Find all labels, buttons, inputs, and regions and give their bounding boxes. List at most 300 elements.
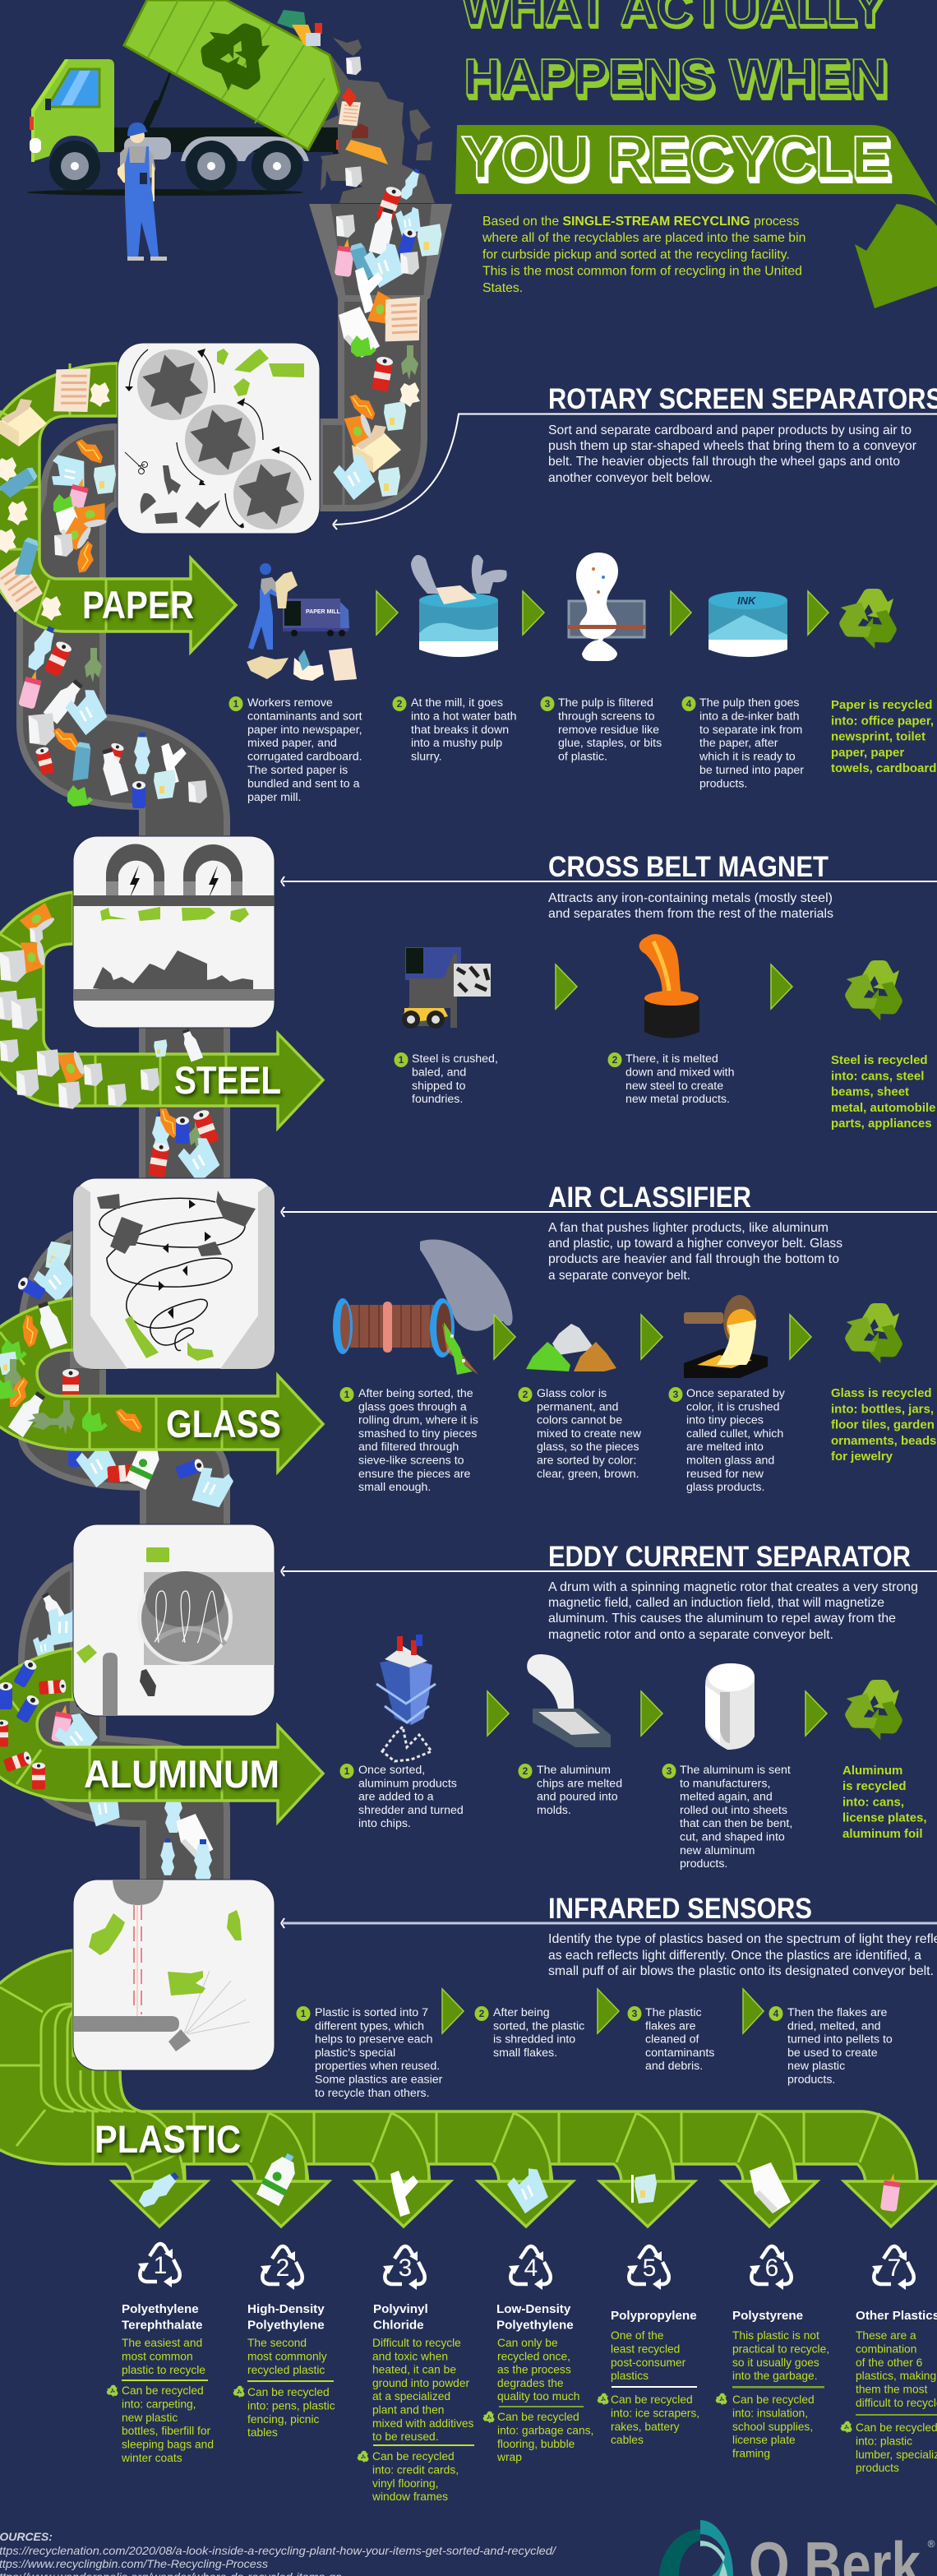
dark pile [93,950,253,993]
lift cylinder [141,72,171,127]
flying aluminum [76,1644,97,1663]
uses 2: fencing, picnic [247,2413,320,2426]
icon: worker and truck [247,563,357,681]
resin code 5 [627,2246,669,2290]
icon: hot water tank [411,555,507,657]
description 3: ground into powder [372,2377,470,2389]
step 2 plastic: is shredded into [493,2033,575,2046]
uses 1: bottles, fiberfill for [122,2425,211,2437]
description 4: recycled once, [497,2350,570,2362]
description 2: recycled plastic [247,2364,325,2376]
resin code 5: 5 [643,2255,656,2282]
step 1 paper: Workers remove [247,696,333,710]
chute arrow 1 [113,2181,207,2227]
uses 3: window frames [372,2490,448,2503]
step 1 glass: smashed to tiny pieces [358,1427,477,1441]
result paper: newsprint, toilet [831,730,925,744]
step 3 plastic: and debris. [645,2060,703,2073]
arrow step paper 4 [808,591,829,635]
uses 7: into: plastic [856,2435,912,2447]
step 4 paper: to separate ink from [699,724,802,737]
laser beams [134,1905,141,2014]
description 7: them the most [856,2384,928,2396]
belt: steel green [0,892,323,1128]
name 1: Polyethylene [122,2302,199,2316]
step 1 plastic: plastic's special [315,2046,395,2060]
step 1 paper: 1 [233,698,239,710]
step 3 aluminum: rolled out into sheets [680,1804,787,1817]
step 2 paper [393,696,517,764]
description 3: to be reused. [372,2430,439,2443]
description: magnet: Attracts any iron-containing metals (mostly steel) [548,891,833,905]
uses 4: flooring, bubble [497,2438,575,2450]
step 1 paper: bundled and sent to a [247,777,360,790]
step 1 glass: sieve-like screens to [358,1454,464,1467]
description 3: heated, it can be [372,2364,456,2376]
intro text: where all of the recyclables are placed into the same bin [482,231,805,245]
step 4 plastic: be used to create [787,2046,878,2060]
uses 4: wrap [496,2451,522,2463]
name 6: Polystyrene [732,2309,803,2323]
description 7: plastics, making [856,2370,936,2382]
step 1 paper: contaminants and sort [247,710,362,723]
funnel conveyor [309,204,452,508]
belt segment to air classifier [142,1024,227,1184]
cab window [48,69,99,107]
description 1: plastic to recycle [122,2364,205,2376]
panel: infrared sensors [73,1880,275,2070]
result glass: Glass is recycled [831,1386,932,1400]
name 5: Polypropylene [611,2309,697,2323]
arrow step aluminum 1 [487,1691,509,1736]
title line: happens when: HAPPENS WHEN [464,49,888,106]
uses 1: sleeping bags and [122,2439,214,2451]
icon: pouring aluminum [527,1654,611,1747]
uses 6: Can be recycled [732,2393,815,2406]
chassis [114,127,338,152]
arrow step steel 2 [771,964,792,1009]
uses 5: cables [611,2434,644,2446]
description 6: This plastic is not [732,2329,819,2342]
step 1 steel [395,1052,498,1106]
step 3 glass: reused for new [686,1468,764,1481]
trash on steel belt [0,903,223,1186]
step 1 steel: foundries. [412,1093,463,1106]
name 3: Chloride [373,2318,424,2332]
uses 5: into: ice scrapers, [611,2407,699,2419]
step 3 aluminum: that can then be bent, [680,1817,792,1830]
name 2: Polyethylene [247,2318,325,2332]
trash on glass belt [0,1300,145,1437]
step 2 steel: There, it is melted [625,1052,718,1066]
uses 3: vinyl flooring, [372,2477,439,2490]
step 3 glass: called cullet, which [686,1427,783,1441]
uses 1: winter coats [121,2452,182,2464]
icon: recycle aluminum [838,1680,909,1745]
step 1 plastic: helps to preserve each [315,2033,433,2046]
step 1 plastic [296,2006,443,2100]
description 2: most commonly [247,2350,327,2362]
arrow step paper 2 [523,591,544,635]
step 2 steel: new steel to create [625,1080,723,1093]
rotary wheels [136,349,306,530]
resin code 2 [261,2246,302,2290]
step 2 paper: that breaks it down [411,724,509,737]
step 2 plastic [475,2006,584,2060]
description 3: Difficult to recycle [372,2337,461,2349]
step 3 paper [541,696,662,764]
intro text: States. [482,281,523,295]
paper mill truck [283,599,340,628]
step 3 plastic [628,2006,714,2073]
description 5: post-consumer [611,2356,686,2369]
step 2 plastic: sorted, the plastic [493,2019,584,2033]
uses 1: Can be recycled [122,2384,204,2397]
belt: paper green [0,363,236,652]
truck [27,0,339,196]
trash on aluminum gray belt [33,1591,213,1885]
step 2 plastic: After being [493,2006,550,2019]
result aluminum: aluminum foil [842,1827,922,1841]
step 4 plastic: turned into pellets to [787,2033,893,2046]
step 1 glass: 1 [344,1389,350,1400]
description: rotary: belt. The heavier objects fall through the wheel gaps and onto [548,455,900,469]
step 2 aluminum: molds. [537,1804,571,1817]
intro text: Based on the SINGLE-STREAM RECYCLING process [482,215,799,229]
step 2 paper: into a hot water bath [411,710,517,723]
falling trash silhouettes [321,38,435,203]
callout line: infrared [281,1918,937,1928]
step 4 plastic: products. [787,2074,835,2087]
step 1 glass: rolling drum, where it is [358,1414,478,1427]
upper belt [73,895,275,906]
green sorted items [217,349,304,396]
callout line: eddy [281,1566,937,1576]
description 1: The easiest and [122,2337,202,2349]
fender [181,136,309,161]
carried cardboard [275,571,298,608]
step 2 paper: At the mill, it goes [411,696,503,710]
step 1 steel: Steel is crushed, [412,1052,498,1066]
step 1 paper [228,696,362,804]
uses 5: Can be recycled [611,2393,693,2406]
resin code 4: 4 [524,2255,538,2282]
result glass: for jewelry [831,1450,893,1464]
dark bottle [140,1669,156,1696]
result paper: into: office paper, [831,714,934,728]
description: magnet [548,891,833,921]
step 3 paper: The pulp is filtered [558,696,653,710]
step 1 glass: ensure the pieces are [358,1468,471,1481]
step 2 glass: permanent, and [537,1400,618,1413]
intro text: for curbside pickup and sorted at the recycling facility. [482,247,790,261]
worker [118,123,167,261]
description 1: most common [122,2350,193,2362]
panel: rotary screen [118,343,320,534]
heading: air classifier: AIR CLASSIFIER [548,1182,751,1214]
step 2 paper: 2 [397,698,403,710]
mini recycle 5 [596,2393,610,2407]
uses 3: Can be recycled [372,2450,455,2463]
arrow step plastic 2 [598,1989,619,2033]
heading: infrared: INFRARED SENSORS [548,1893,812,1925]
field loops [155,1591,222,1643]
plastic type 6 [714,2246,829,2460]
arrow step plastic 1 [442,1989,464,2033]
step 2 aluminum: chips are melted [537,1777,622,1790]
resin code 6 [750,2246,792,2290]
description: rotary: push them up star-shaped wheels that bring them to a conveyor [548,439,916,453]
resin code 7: 7 [888,2255,901,2282]
belt: aluminum green [0,1649,323,1822]
step 3 aluminum: melted again, and [680,1791,773,1804]
air spiral [99,1198,245,1351]
uses 1: new plastic [122,2412,178,2424]
uses 1: into: carpeting, [122,2398,196,2410]
result glass: into: bottles, jars, [831,1402,934,1416]
step 3 glass: color, it is crushed [686,1400,780,1413]
description: air: A fan that pushes lighter products, like aluminum [548,1221,829,1235]
result steel: parts, appliances [831,1117,932,1131]
step 1 plastic: Plastic is sorted into 7 [315,2006,428,2019]
step 2 steel: new metal products. [625,1093,730,1106]
description: air [548,1221,842,1283]
cab [31,59,114,162]
result aluminum: is recycled [842,1779,907,1793]
plastic type 5 [596,2246,699,2446]
step 2 glass: clear, green, brown. [537,1468,639,1481]
magnetic rotor block [144,1572,275,1665]
step 3 aluminum: products. [680,1857,727,1871]
step 3 glass: molten glass and [686,1454,774,1467]
step 3 aluminum: cut, and shaped into [680,1830,785,1843]
arrow step aluminum 3 [805,1691,827,1736]
banner text: YOU RECYCLE [461,125,891,191]
divider 6 [732,2386,824,2388]
air puff lines [184,1971,250,2034]
step 1 paper: paper mill. [247,791,301,804]
description: infrared: as each reflects light differently. Once the plastics are identified, a [548,1949,921,1963]
chute arrow 4 [478,2181,573,2227]
plastic items [136,2149,902,2217]
step 3 aluminum [662,1764,792,1871]
step 2 plastic: small flakes. [493,2046,557,2060]
icon: glass piles [526,1324,616,1371]
arrow step glass 1 [494,1315,515,1359]
sources: https://www.recyclingbin.com/The-Recycling-Process [0,2557,268,2570]
plastic type 4 [482,2246,593,2463]
step 4 paper: which it is ready to [699,751,796,764]
step 4 paper: 4 [686,698,692,710]
uses 6: license plate [732,2434,796,2446]
description 4: as the process [497,2364,571,2376]
step 1 steel: 1 [399,1054,404,1066]
step 1 plastic: Some plastics are easier [315,2074,443,2087]
recycle on bed [181,8,284,108]
description: rotary [548,423,916,485]
step 3 aluminum: new aluminum [680,1844,755,1857]
uses 4: into: garbage cans, [497,2424,593,2436]
step 1 aluminum: 1 [344,1765,350,1777]
arrow step paper 3 [671,591,691,635]
step 2 steel [608,1052,735,1106]
resin code 3 [383,2246,425,2290]
divider 4 [499,2406,584,2407]
description: eddy: magnetic rotor and onto a separate conveyor belt. [548,1628,833,1642]
result aluminum: Aluminum [842,1764,902,1778]
result steel: into: cans, steel [831,1069,924,1083]
icon: molten steel [639,934,699,1038]
step 1 glass: After being sorted, the [358,1387,473,1400]
icon: ink tank: INK [737,594,757,607]
uses 2: into: pens, plastic [247,2399,335,2412]
heading: cross belt magnet: CROSS BELT MAGNET [548,851,829,883]
mini recycle 4 [482,2412,496,2425]
lower belt [73,989,275,1001]
step 3 aluminum: to manufacturers, [680,1777,770,1790]
step 1 glass: small enough. [358,1481,431,1494]
description 7: of the other 6 [856,2356,923,2369]
label: aluminum: ALUMINUM [84,1752,279,1796]
plastic type 3 [356,2246,474,2503]
step 2 steel: down and mixed with [625,1066,735,1079]
divider 1 [122,2379,208,2381]
icon: ink tank [709,591,787,657]
description 6: into the garbage. [732,2370,818,2382]
description 3: at a specialized [372,2390,450,2403]
description: infrared: small puff of air blows the plastic onto its designated conveyor belt. [548,1964,934,1978]
step 3 plastic: 3 [632,2008,638,2019]
description 2: The second [247,2337,307,2349]
step 2 glass: 2 [523,1389,529,1400]
magnets [106,844,242,900]
step 3 aluminum: The aluminum is sent [680,1764,791,1777]
worker body [248,577,286,650]
mini recycle 6 [714,2393,728,2407]
chute arrow 6 [722,2181,817,2227]
step 2 glass: colors cannot be [537,1414,622,1427]
step 1 plastic: different types, which [315,2019,424,2033]
step 2 aluminum [518,1764,622,1817]
mini recycle 3 [356,2451,370,2464]
plastic type 2 [232,2246,335,2439]
step 3 aluminum: 3 [667,1765,672,1777]
description 5: plastics [611,2370,649,2382]
label: plastic: PLASTIC [95,2117,241,2161]
divider 2 [247,2380,334,2382]
trash on aluminum belt [0,1658,67,1789]
resin code 7 [872,2246,914,2290]
uses 3: into: credit cards, [372,2463,459,2476]
description 4: quality too much [497,2390,579,2403]
step 3 glass: Once separated by [686,1387,785,1400]
result aluminum: into: cans, [842,1795,904,1809]
rotation arrows [129,349,311,528]
name 1: Terephthalate [122,2318,202,2332]
resin code 2: 2 [276,2255,289,2282]
description 3: mixed with additives [372,2417,474,2430]
description 3: plant and then [372,2404,444,2416]
divider 3 [373,2444,474,2446]
step 3 paper: remove residue like [558,724,659,737]
sources: https://recyclenation.com/2020/08/a-look-inside-a-recycling-plant-how-your-items-get-sorted-and-recycled/ [0,2544,557,2557]
uses 6: framing [732,2448,770,2460]
result aluminum: license plates, [842,1811,927,1825]
chute arrow 2 [234,2181,329,2227]
big arrow [855,204,937,308]
trash on paper belt [0,360,207,808]
chute arrow 5 [600,2181,695,2227]
label: glass: GLASS [166,1402,281,1445]
step 2 aluminum: The aluminum [537,1764,611,1777]
mini recycle 2 [232,2386,246,2399]
step 1 glass: and filtered through [358,1441,459,1454]
step 1 steel: baled, and [412,1066,466,1079]
name 2: High-Density [247,2302,325,2316]
step 2 paper: into a mushy pulp [411,737,502,750]
uses 7: products [856,2462,899,2474]
resin code 6: 6 [765,2255,778,2282]
icon: recycle glass [838,1303,909,1368]
divider 7 [856,2414,937,2416]
step 3 glass: into tiny pieces [686,1414,764,1427]
description: eddy: aluminum. This causes the aluminum to repel away from the [548,1612,896,1626]
step 1 paper: paper into newspaper, [247,724,362,737]
description: air: and plastic, up toward a higher conveyor belt. Glass [548,1237,842,1251]
result paper: paper, paper [831,746,904,760]
step 1 plastic: to recycle than others. [315,2087,430,2100]
result steel: beams, sheet [831,1085,909,1099]
result paper: Paper is recycled [831,698,932,712]
name 3: Polyvinyl [373,2302,428,2316]
step 1 aluminum: Once sorted, [358,1764,425,1777]
trash pile in funnel [277,10,441,503]
arrow step glass 2 [641,1315,662,1359]
mini recycle 1 [105,2385,119,2398]
step 1 aluminum [340,1764,464,1830]
step 2 aluminum: 2 [523,1765,529,1777]
divider 5 [612,2386,697,2388]
intro text: This is the most common form of recycling in the United [482,265,802,279]
description: magnet: and separates them from the rest of the materials [548,907,833,921]
step 1 paper: The sorted paper is [247,764,348,777]
uses 6: school supplies, [732,2421,813,2433]
step 3 plastic: flakes are [645,2019,696,2033]
belt: gray glass return [21,1234,227,1529]
sensor head [113,1880,164,1905]
step 1 steel: shipped to [412,1080,466,1093]
step 3 paper: 3 [545,698,551,710]
pole [103,1653,118,1716]
description: air: products are heavier and fall through the bottom to [548,1252,839,1266]
description 7: combination [856,2342,916,2355]
truck shadow [27,189,303,196]
step 4 plastic: new plastic [787,2060,845,2073]
arrow step glass 3 [790,1315,811,1359]
step 2 glass: are sorted by color: [537,1454,636,1467]
step 3 glass: glass products. [686,1481,764,1494]
result steel: metal, automobile [831,1101,936,1115]
plastic type 1 [105,2244,214,2464]
result steel: Steel is recycled [831,1053,928,1067]
uses 2: tables [247,2426,278,2439]
paper piles [247,656,288,679]
callout line: magnet [281,876,937,886]
step 3 paper: of plastic. [558,751,607,764]
icon: pulp filter [567,553,646,661]
step 4 paper: products. [699,777,747,790]
step 1 aluminum: are added to a [358,1791,434,1804]
